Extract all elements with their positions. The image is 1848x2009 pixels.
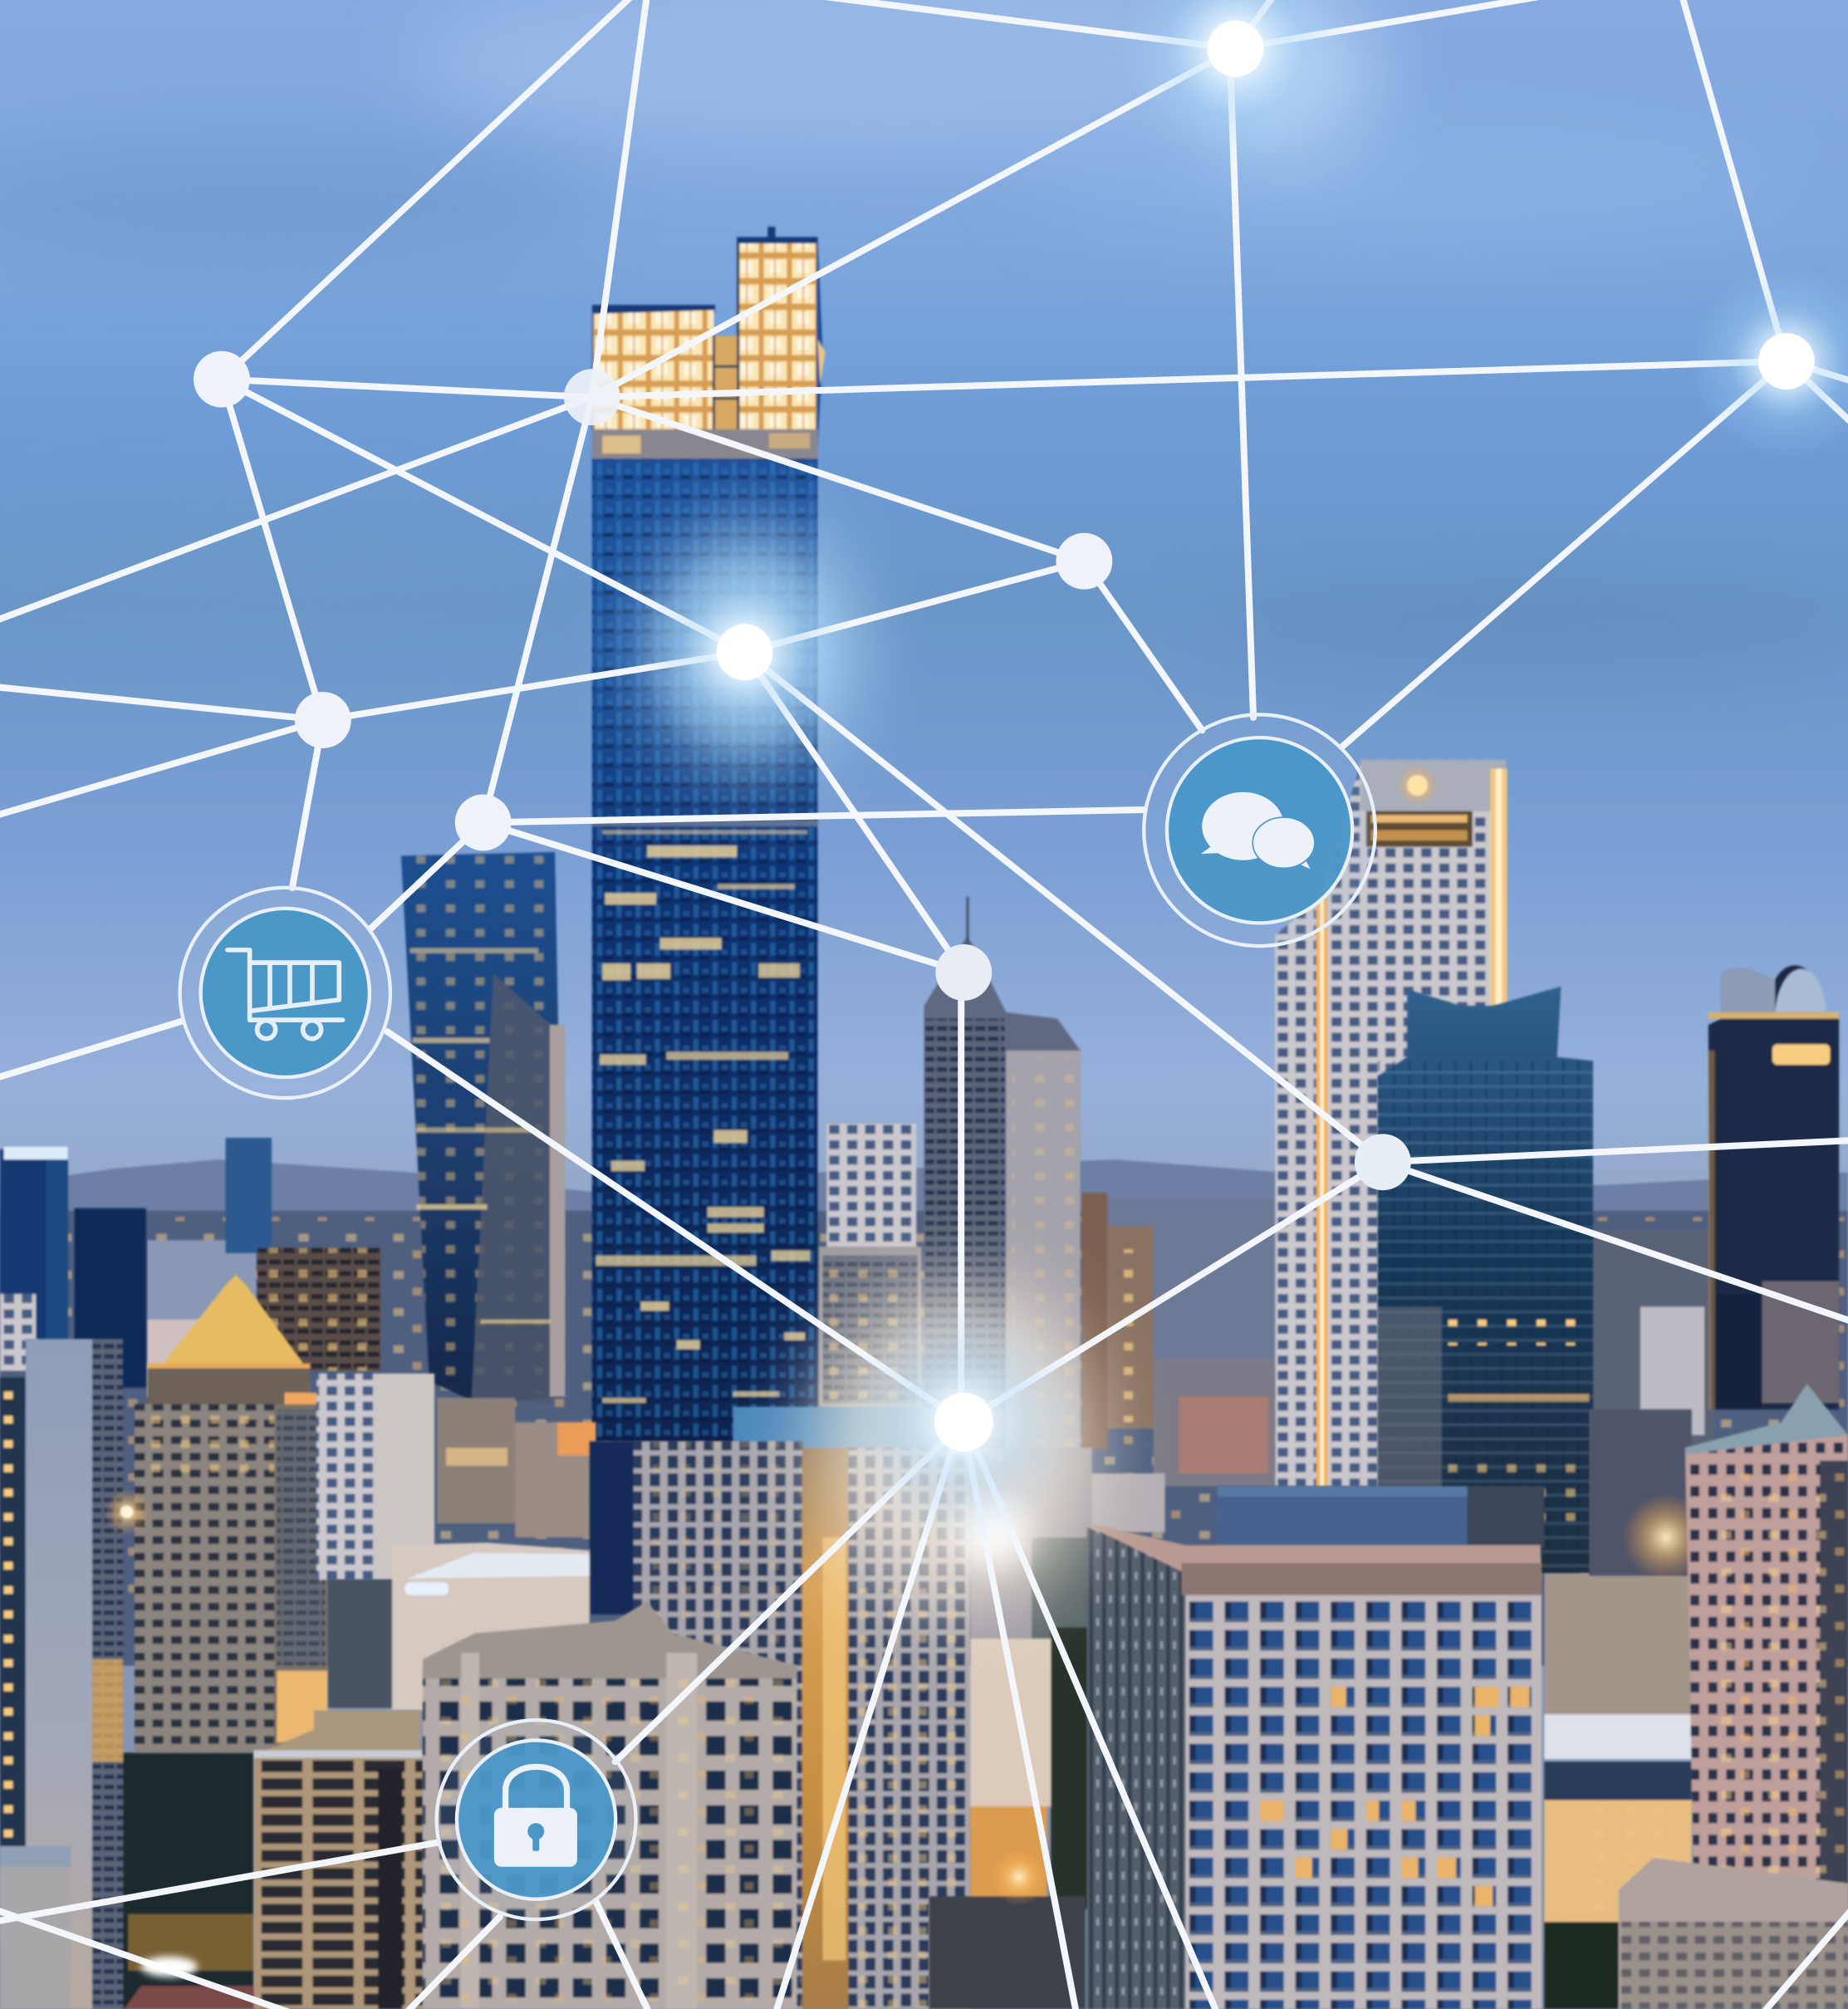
building behind lock icon <box>423 1601 797 2009</box>
soft city glow at hub <box>647 0 1371 1615</box>
far right dark tower <box>1708 966 1839 1409</box>
left gold-roof building <box>0 1275 596 2009</box>
right tall tower with orange light strip <box>1275 760 1507 1487</box>
twisted glass tower <box>401 852 565 1403</box>
far left towers <box>0 1138 380 1388</box>
white slab and twin tower group, center right <box>819 897 1275 1532</box>
right side buildings <box>1544 1384 1848 2009</box>
large foreground office building <box>1086 1487 1544 2009</box>
central main skyscraper <box>592 227 826 1443</box>
lit windows of main tower <box>596 831 810 1403</box>
dark blue tower in front <box>1378 987 1593 1573</box>
lit office windows <box>1260 1687 1529 1907</box>
center building with orange strip <box>633 1407 970 2009</box>
icon: chat bubbles <box>1144 714 1375 946</box>
low cream roof building <box>328 1442 635 1711</box>
brown foreground block <box>254 1711 423 2009</box>
lower center buildings and light <box>929 1448 1092 2009</box>
icon: shopping cart <box>180 888 390 1098</box>
icon: padlock <box>437 1720 636 1919</box>
distant city haze <box>0 1159 1848 1666</box>
